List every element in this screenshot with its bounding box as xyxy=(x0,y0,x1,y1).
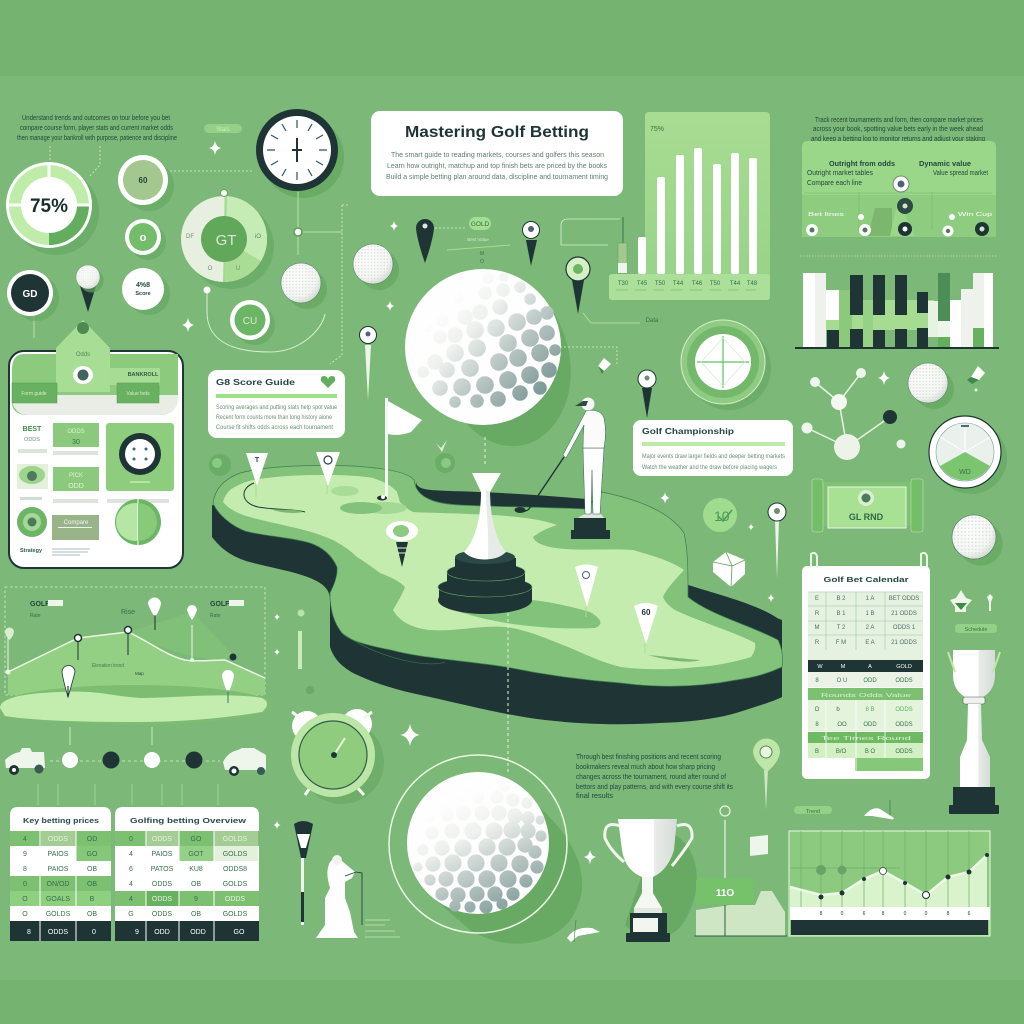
pill label: Trend xyxy=(806,809,820,815)
panel: course hole map: Bet lines xyxy=(808,212,844,218)
elevation chart left: Map xyxy=(135,671,144,676)
trophy tee on tiers xyxy=(438,473,532,614)
notes card: Course fit shifts odds across each tournament xyxy=(216,424,333,431)
table: key betting prices: B xyxy=(90,896,95,903)
curved connector xyxy=(204,286,325,352)
table: key betting prices: ODDS xyxy=(48,929,68,936)
timeline with carts xyxy=(5,727,266,776)
table: betting overview: PATOS xyxy=(151,866,174,873)
title card xyxy=(371,111,623,196)
table: betting overview: 0 xyxy=(129,836,133,843)
segmented wheel GT: DF xyxy=(186,234,194,240)
calendar: 8 xyxy=(815,678,819,684)
pin with green head xyxy=(753,738,780,810)
dashboard target panel xyxy=(106,423,174,491)
golfer statue xyxy=(514,398,610,539)
calendar: R xyxy=(815,611,820,617)
donut chart 75 percent xyxy=(6,162,99,255)
calendar: ODDS 1 xyxy=(893,625,916,631)
head and cap xyxy=(582,398,594,410)
table: betting overview: 9 xyxy=(194,896,198,903)
icon: alarm clock xyxy=(291,709,384,804)
right dark ribbon xyxy=(686,585,780,650)
calendar: ODD xyxy=(863,678,877,684)
table: key betting prices: O xyxy=(22,911,28,918)
table: key betting prices: OB xyxy=(87,911,97,918)
dashboard lower row: Strategy xyxy=(20,548,43,554)
card: golf championship xyxy=(633,420,793,476)
stat circle CU xyxy=(230,300,275,345)
table: betting overview: 6 xyxy=(129,866,133,873)
table: betting overview: GO xyxy=(191,836,202,843)
small white shape xyxy=(864,800,894,819)
table: betting overview: 9 xyxy=(135,929,139,936)
flag pin marker left xyxy=(246,453,268,497)
course shadows xyxy=(244,483,700,664)
table: betting overview: ODDS xyxy=(152,896,172,903)
line chart bottom right: 6 xyxy=(863,911,866,917)
table: key betting prices: GOALS xyxy=(46,896,70,903)
calendar: GOLD xyxy=(896,664,912,670)
bar chart panel: T44 xyxy=(673,281,684,287)
intro text top left xyxy=(17,115,177,142)
text top right: and keep a betting log to monitor returns and adjust your staking xyxy=(811,136,985,143)
sparkle xyxy=(660,492,670,504)
flag pin marker left: T xyxy=(255,457,260,464)
pill label xyxy=(204,124,242,133)
calendar: B O xyxy=(865,749,875,755)
title: Mastering Golf Betting xyxy=(405,124,589,141)
notes card: Scoring averages and putting stats help spot value xyxy=(216,404,337,411)
panel: course hole map: Compare each line xyxy=(807,180,862,187)
segmented wheel GT: U xyxy=(236,266,240,272)
notes card xyxy=(208,370,345,438)
stat circle O: o xyxy=(140,232,147,244)
table: betting overview: GOLDS xyxy=(223,881,248,888)
calendar: 21 ODDS xyxy=(891,640,917,646)
course light green xyxy=(223,475,755,669)
calendar: BET ODDS xyxy=(889,596,919,602)
elevation chart left: Rate xyxy=(210,613,221,619)
small diamond icon xyxy=(967,366,985,392)
left cart xyxy=(5,748,45,775)
ball xyxy=(353,244,399,290)
pill label: Stats xyxy=(216,127,230,133)
bottom golf ball with ring xyxy=(389,755,582,944)
text top right xyxy=(811,117,985,143)
text top right: Track recent tournaments and form, then compare market prices xyxy=(815,117,983,124)
course base xyxy=(212,505,782,724)
dashboard header xyxy=(12,320,178,415)
bar chart panel: T50 xyxy=(710,281,721,287)
table: betting overview: ODDS8 xyxy=(223,866,247,873)
line chart bottom right: 8 xyxy=(947,911,950,917)
sparkle xyxy=(209,141,221,155)
elevation chart left: GOLF xyxy=(30,601,50,608)
dashboard stat cells: 30 xyxy=(72,439,80,446)
table: key betting prices: O xyxy=(22,896,28,903)
calendar: B xyxy=(815,749,819,755)
small notes by statue xyxy=(365,920,400,937)
calendar: O U xyxy=(837,678,847,684)
green check badge xyxy=(703,498,737,532)
icon: ball on tee xyxy=(76,265,104,312)
pill label with note: M xyxy=(480,251,484,257)
panel: betting dashboard xyxy=(9,320,183,568)
elevation chart left: Rise xyxy=(121,609,135,616)
calendar: 21 ODDS xyxy=(891,611,917,617)
green check badge: 10 xyxy=(714,508,730,524)
pie wheel xyxy=(929,416,1007,494)
panel: course hole map: Win Cup xyxy=(958,212,992,218)
table: betting overview: GOLDS xyxy=(223,836,248,843)
calendar: 1 B xyxy=(865,611,875,617)
calendar: B 1 xyxy=(836,611,846,617)
text block center bottom: Through best finishing positions and recent scoring xyxy=(576,754,721,761)
pill label: Schedule xyxy=(965,627,987,633)
stat circle dark GD: GD xyxy=(22,289,38,300)
text top right: across your book, spotting value bets early in the week ahead xyxy=(813,126,983,133)
table: betting overview: Golfing betting Overview xyxy=(130,816,246,825)
intro text top left: compare course form, player stats and current market odds xyxy=(20,125,173,132)
chart pins xyxy=(5,598,236,703)
flag with score panel: 11O xyxy=(716,888,734,899)
stat circle CU: CU xyxy=(243,316,257,327)
table: betting overview: GOLDS xyxy=(223,851,248,858)
small course pin xyxy=(634,603,658,653)
intro text top left: Understand trends and outcomes on tour before you bet xyxy=(22,115,170,122)
stacked bar chart xyxy=(795,273,999,349)
statue golfer xyxy=(316,855,362,938)
subtitle text xyxy=(386,150,608,181)
dashboard header: Form guide xyxy=(21,391,47,397)
calendar: ODDS xyxy=(895,678,913,684)
ball xyxy=(908,363,954,409)
dashboard stat cells: ODDS xyxy=(67,429,85,435)
panel: course hole map: Outright market tables xyxy=(807,170,873,177)
table: key betting prices: 8 xyxy=(23,866,27,873)
pill label with note: O xyxy=(480,259,484,265)
intro text top left: then manage your bankroll with purpose, patience and discipline xyxy=(17,135,177,142)
subtitle text: Learn how outright, matchup and top finish bets are priced by the books xyxy=(387,161,607,170)
flag pin marker xyxy=(316,452,340,494)
table: betting overview: GOLDS xyxy=(223,911,248,918)
pin green xyxy=(566,257,590,314)
table: key betting prices: OB xyxy=(87,881,97,888)
medium trophy xyxy=(605,819,697,942)
bar chart panel: T48 xyxy=(747,281,758,287)
dashboard stat cells: ODD xyxy=(68,483,84,490)
dashboard stat cells: BEST xyxy=(23,426,42,433)
small course pin: 60 xyxy=(642,608,651,617)
card: golf championship: Watch the weather and the draw before placing wagers xyxy=(642,464,778,471)
line chart bottom right: 0 xyxy=(925,911,928,917)
bar chart panel: 75% xyxy=(650,126,664,133)
tee marker on course xyxy=(386,521,418,567)
network diagram xyxy=(802,368,906,460)
stat circle 60 xyxy=(118,155,174,211)
calendar xyxy=(802,553,930,779)
flag with score panel xyxy=(694,806,787,936)
table: betting overview: ODDS xyxy=(225,896,245,903)
sparkle xyxy=(878,371,890,385)
table: key betting prices: 0 xyxy=(23,881,27,888)
stat circle 60: 60 xyxy=(139,176,148,185)
pie wheel: WD xyxy=(959,469,971,476)
pill label xyxy=(955,624,997,633)
table: key betting prices: OB xyxy=(87,866,97,873)
calendar: B/O xyxy=(836,749,846,755)
table: betting overview: ODDS xyxy=(152,881,172,888)
bar chart panel: T30 xyxy=(618,281,629,287)
calendar: O xyxy=(815,707,820,713)
calendar: A xyxy=(868,664,872,670)
stat circle O xyxy=(125,219,166,260)
line chart bottom right xyxy=(789,831,990,936)
table: betting overview: ODD xyxy=(190,929,206,936)
table: betting overview: 4 xyxy=(129,896,133,903)
small course pin xyxy=(575,564,598,617)
stat circle score: 4%8 xyxy=(136,282,150,289)
elevation chart left: Elevation trend xyxy=(92,663,124,669)
table: betting overview: GOT xyxy=(188,851,204,858)
dashboard lower row: Compare xyxy=(64,520,89,526)
table: key betting prices: 0 xyxy=(92,929,96,936)
calendar: M xyxy=(814,625,820,631)
icon: golf club xyxy=(294,821,313,925)
golf course island xyxy=(212,466,783,724)
pin with shaft xyxy=(360,326,376,400)
pin lower xyxy=(638,370,656,418)
calendar: Golf Bet Calendar xyxy=(824,575,909,584)
callout line and label: Data xyxy=(646,318,659,324)
bar chart panel: T46 xyxy=(692,281,703,287)
text block center bottom xyxy=(576,754,733,800)
dashboard header: Odds xyxy=(76,352,90,358)
table: key betting prices: OD xyxy=(87,836,97,843)
table: key betting prices: PAIOS xyxy=(48,851,69,858)
table: key betting prices: GO xyxy=(87,851,98,858)
elevation chart left: Rate xyxy=(30,613,41,619)
calendar: b xyxy=(836,707,840,713)
table: key betting prices: 9 xyxy=(23,851,27,858)
star and pin icons xyxy=(950,590,993,612)
pill label xyxy=(794,806,832,815)
table: key betting prices: Key betting prices xyxy=(23,816,99,825)
panel: course hole map: Outright from odds xyxy=(829,161,895,168)
calendar: OO xyxy=(837,722,847,728)
pill label with note: GOLD xyxy=(471,221,490,228)
calendar: 8 xyxy=(815,722,819,728)
dotted divider xyxy=(800,255,998,257)
dashboard header: Value bets xyxy=(126,391,150,397)
dashboard stat cells xyxy=(17,423,169,503)
bar chart panel: T45 xyxy=(637,281,648,287)
donut chart 75 percent: 75% xyxy=(30,196,68,217)
table: key betting prices: ON/OD xyxy=(47,881,69,888)
text block center bottom: bettors and play patterns, and with every course shift its xyxy=(576,784,733,791)
table: betting overview: KU8 xyxy=(189,866,203,873)
card: golf championship: Major events draw larger fields and deeper betting markets xyxy=(642,453,786,460)
legs xyxy=(583,448,604,514)
dashed vertical lines xyxy=(485,437,508,772)
pin with long shaft xyxy=(768,503,786,578)
sparkle and small stick xyxy=(274,610,314,694)
table: key betting prices: 4 xyxy=(23,836,27,843)
pill label with note: Best Value xyxy=(467,237,489,242)
rear dark ribbon xyxy=(416,482,586,509)
calendar: T 2 xyxy=(837,625,846,631)
text block center bottom: final results xyxy=(576,793,614,800)
table connector lines xyxy=(38,784,218,805)
subtitle text: Build a simple betting plan around data, discipline and tournament timing xyxy=(386,172,608,181)
table: betting overview: 4 xyxy=(129,881,133,888)
calendar: ODDS xyxy=(895,722,913,728)
line chart bottom right: 0 xyxy=(841,911,844,917)
stat circle score: Score xyxy=(135,291,151,297)
text block center bottom: changes across the tournament, round after round of xyxy=(576,774,726,781)
ball xyxy=(281,263,327,309)
calendar: F M xyxy=(836,640,846,646)
bar chart panel: T50 xyxy=(655,281,666,287)
icon: flag on green xyxy=(377,398,422,500)
calendar: ODDS xyxy=(895,707,913,713)
icon: wall clock xyxy=(256,109,344,198)
table: betting overview: GO xyxy=(234,929,245,936)
dashboard lower row xyxy=(17,499,161,555)
decorative dotted links xyxy=(50,146,350,364)
table: key betting prices: ODDS xyxy=(48,836,68,843)
decorative sparkles and droplets xyxy=(209,221,775,864)
right cart xyxy=(223,748,266,776)
pill label with note xyxy=(435,217,510,265)
calendar: Tee Times Round xyxy=(821,736,911,742)
connector to diamond xyxy=(560,347,617,374)
panel: course hole map xyxy=(802,141,996,237)
table: key betting prices: GOLDS xyxy=(46,911,71,918)
calendar: M xyxy=(841,664,846,670)
table: key betting prices: PAIOS xyxy=(48,866,69,873)
calendar: ODD xyxy=(863,722,877,728)
segmented wheel GT: O xyxy=(208,266,213,272)
table: betting overview: OB xyxy=(191,911,201,918)
segmented wheel GT: GT xyxy=(216,232,236,249)
line chart bottom right: 0 xyxy=(904,911,907,917)
table: betting overview: OB xyxy=(191,881,201,888)
calendar: B 2 xyxy=(836,596,846,602)
table: betting overview: ODD xyxy=(154,929,170,936)
club xyxy=(518,457,564,512)
calendar: 1 A xyxy=(866,596,874,602)
line chart bottom right: 6 xyxy=(968,911,971,917)
calendar: 8 B xyxy=(865,707,875,713)
line chart bottom right: 8 xyxy=(820,911,823,917)
segmented wheel GT xyxy=(181,190,274,289)
table: betting overview: G xyxy=(128,911,134,918)
notes card: G8 Score Guide xyxy=(216,378,296,387)
banner: GL RND xyxy=(849,512,884,522)
calendar: R xyxy=(815,640,820,646)
elevation chart left xyxy=(0,587,272,725)
calendar: E A xyxy=(865,640,875,646)
table: betting overview: PAIOS xyxy=(152,851,173,858)
calendar: 2 A xyxy=(866,625,874,631)
dashboard stat cells: PICK xyxy=(69,473,83,479)
target gauge xyxy=(681,320,771,410)
dashboard header: BANKROLL xyxy=(128,372,159,378)
notes card: Recent form counts more than long history alone xyxy=(216,414,332,421)
stat circle score xyxy=(122,268,170,315)
table: betting overview: ODDS xyxy=(152,836,172,843)
table: betting overview: 4 xyxy=(129,851,133,858)
bracket and gauge beside bar chart xyxy=(561,217,627,273)
calendar: Rounds Odds Value xyxy=(821,693,911,699)
tall trophy xyxy=(948,650,1000,814)
pin dark xyxy=(416,219,434,263)
calendar: ODDS xyxy=(895,749,913,755)
segmented wheel GT: iO xyxy=(255,234,261,240)
icon: folded box xyxy=(713,552,745,587)
banner xyxy=(812,479,923,532)
table: betting overview xyxy=(115,807,259,941)
table: key betting prices xyxy=(10,807,111,941)
bar chart panel xyxy=(609,112,770,300)
table: key betting prices: 8 xyxy=(27,929,31,936)
course fairway xyxy=(213,466,783,686)
large golf ball xyxy=(405,269,571,446)
text block center bottom: bookmakers reveal much about how sharp pricing xyxy=(576,764,715,771)
calendar: W xyxy=(817,664,823,670)
small divot xyxy=(567,920,600,942)
bar chart panel: T44 xyxy=(730,281,741,287)
pin white xyxy=(522,222,540,266)
panel: course hole map: Dynamic value xyxy=(919,161,971,168)
stat circle dark GD xyxy=(7,270,59,338)
panel: course hole map: Value spread market xyxy=(933,170,988,177)
callout line and label xyxy=(583,313,659,324)
elevation chart left: GOLF xyxy=(210,601,230,608)
dashboard stat cells: ODDS xyxy=(24,437,40,443)
calendar: E xyxy=(815,596,819,602)
line chart bottom right: 8 xyxy=(882,911,885,917)
sparkle xyxy=(182,318,194,332)
connector from clock xyxy=(294,192,342,255)
table: betting overview: ODDS xyxy=(152,911,172,918)
subtitle text: The smart guide to reading markets, courses and golfers this season xyxy=(391,150,604,159)
pedestal xyxy=(571,518,610,539)
torso and arm xyxy=(563,410,606,458)
ball xyxy=(952,515,1003,566)
card: golf championship: Golf Championship xyxy=(642,427,734,436)
